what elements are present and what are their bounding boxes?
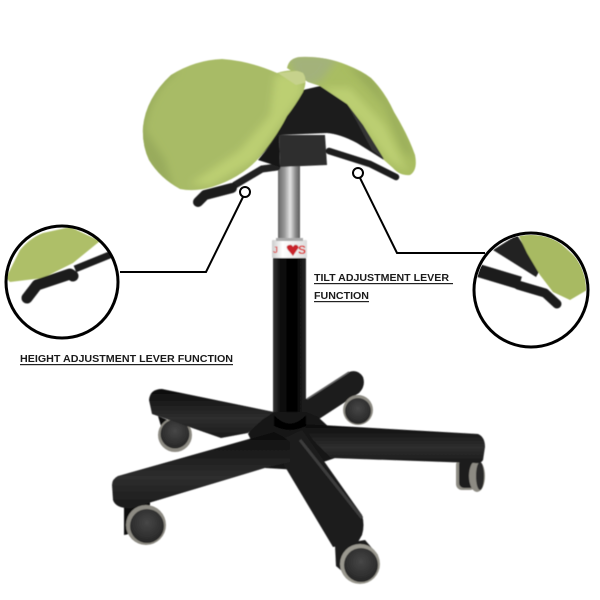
- black column: [273, 257, 306, 430]
- label: tilt adjustment lever function: [314, 272, 453, 302]
- base back right arm: [303, 371, 364, 424]
- collar with logo: [272, 238, 307, 258]
- right seat wing: [286, 56, 416, 176]
- base back left arm: [149, 389, 274, 438]
- caster front right: [335, 540, 380, 584]
- caster right: [456, 459, 485, 492]
- left seat wing: [142, 58, 306, 191]
- lower column hub: [274, 415, 306, 430]
- caster back right: [343, 395, 373, 425]
- height lever: [198, 167, 277, 202]
- collar with logo: S: [298, 243, 306, 257]
- saddle stool: [112, 50, 485, 584]
- inset: tilt lever detail: [470, 232, 590, 347]
- base front left arm: [112, 432, 290, 508]
- tilt lever: [329, 151, 396, 177]
- callout: height adjustment leader: [120, 187, 250, 272]
- base front right arm: [283, 430, 364, 547]
- label: tilt adjustment lever function: TILT ADJUSTMENT LEVER: [314, 272, 449, 284]
- base right arm: [303, 424, 485, 463]
- caster back left: [158, 416, 192, 452]
- callout: tilt adjustment leader: [353, 168, 485, 253]
- seat bracket block: [279, 135, 327, 167]
- label: height adjustment lever function: HEIGHT ADJUSTMENT LEVER FUNCTION: [20, 353, 233, 365]
- seat underside shell: [257, 86, 384, 160]
- gas lift chrome pole: [278, 165, 300, 242]
- base hub: [248, 412, 335, 470]
- label: tilt adjustment lever function: FUNCTION: [314, 290, 369, 302]
- collar with logo: J: [273, 245, 278, 255]
- inset: height lever detail: [6, 226, 118, 338]
- caster front left: [124, 502, 166, 545]
